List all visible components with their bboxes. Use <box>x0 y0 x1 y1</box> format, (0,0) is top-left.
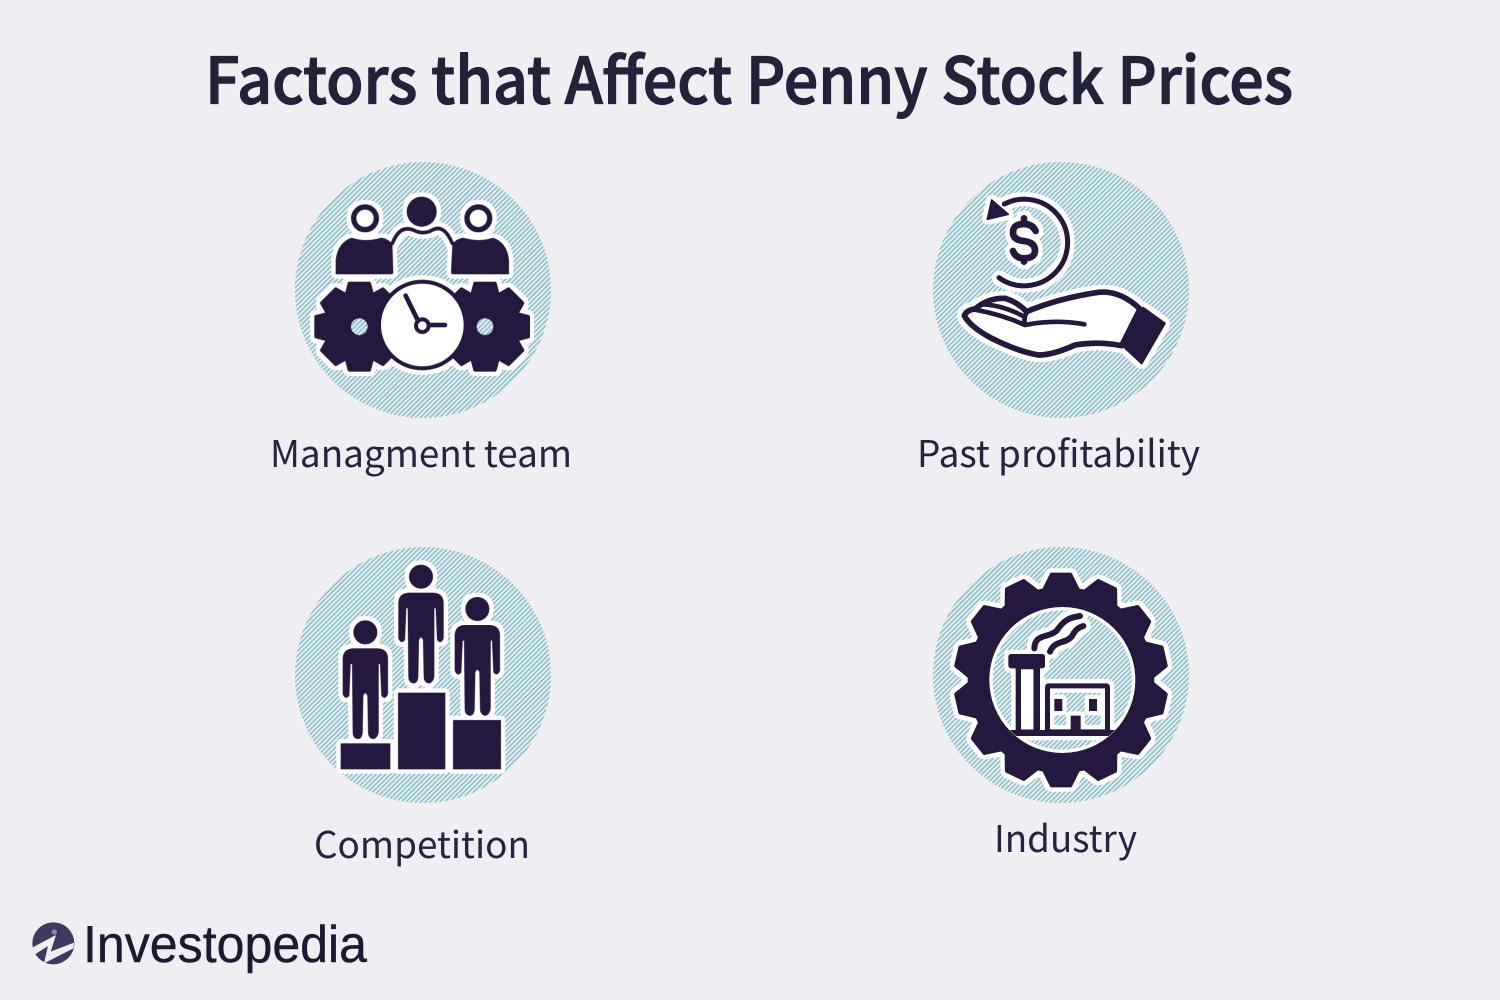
icon: hand receiving dollar <box>964 199 1165 364</box>
logo: Investopedia <box>32 916 367 974</box>
icon: people, gears and clock <box>316 197 528 370</box>
hatched circle: past profitability <box>933 162 1189 418</box>
logo wordmark: Investopedia <box>83 916 367 974</box>
hatched circle: industry <box>933 547 1189 803</box>
label: industry: Industry <box>994 809 1137 863</box>
label: competition: Competition <box>314 815 530 869</box>
hatched circle: competition <box>295 547 551 803</box>
panel: management team <box>270 162 572 478</box>
hatched circle: management team <box>295 162 551 418</box>
logo mark <box>32 922 74 964</box>
label: management team: Managment team <box>270 424 572 478</box>
title: Factors that Affect Penny Stock Prices <box>205 30 1293 122</box>
panel: industry <box>933 547 1189 863</box>
infographic canvas <box>32 51 1292 974</box>
panel: competition <box>295 547 551 869</box>
label: past profitability: Past profitability <box>917 424 1200 478</box>
panel: past profitability <box>917 162 1200 478</box>
icon: factory in gear <box>955 575 1167 785</box>
icon: people on podium <box>341 565 501 769</box>
